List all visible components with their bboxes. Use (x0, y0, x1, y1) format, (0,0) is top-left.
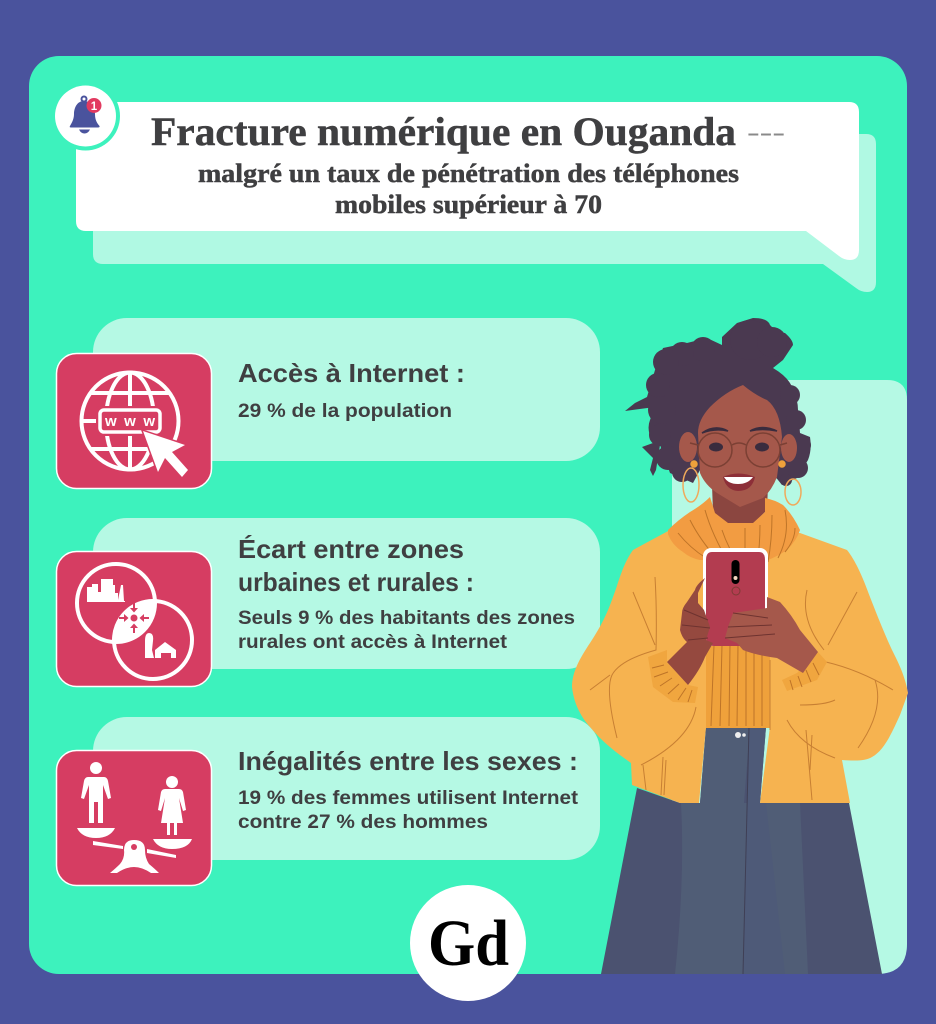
panel: gender inequality (56, 717, 600, 886)
card background (93, 318, 600, 461)
heading: Inégalités entre les sexes : (238, 746, 578, 776)
stand (110, 840, 159, 873)
body text line 2: contre 27 % des hommes (238, 811, 488, 833)
heading line 2: urbaines et rurales : (238, 567, 474, 597)
icon tile: globe www cursor: www (104, 413, 155, 430)
hands (667, 578, 818, 685)
turtleneck (668, 497, 800, 566)
card background (93, 717, 600, 860)
subtitle: malgré un taux de pénétration des téléphones (198, 159, 739, 188)
body text line 2: rurales ont accès à Internet (238, 631, 508, 653)
icon: notification bell: 1 (91, 101, 98, 113)
man (90, 762, 102, 774)
heading: Accès à Internet : (238, 358, 465, 388)
phone (703, 548, 768, 646)
sweater body (704, 630, 770, 728)
eyes (709, 442, 769, 452)
panel: urban rural gap (56, 518, 600, 686)
city silhouette (87, 579, 125, 602)
beam (93, 841, 176, 858)
smile (723, 474, 755, 491)
subtitle line 2: mobiles supérieur à 70 (335, 190, 602, 219)
icon tile: globe www cursor (56, 354, 212, 488)
illustration: woman holding phone (572, 318, 908, 974)
earrings (683, 461, 801, 505)
body text: 29 % de la population (238, 400, 452, 422)
panel: internet access (56, 318, 600, 488)
face (698, 385, 782, 507)
left plate (77, 828, 115, 838)
logo: Gd (410, 885, 526, 1001)
title: Fracture numérique en Ouganda (151, 109, 736, 154)
icon tile: overlapping circles (56, 552, 212, 686)
arrows converging (119, 603, 149, 633)
title speech bubble (76, 102, 876, 292)
right plate (153, 839, 192, 849)
barn and silo (145, 633, 176, 658)
cuffs (648, 650, 827, 703)
glasses (690, 433, 787, 467)
panel: light backdrop behind the woman (672, 380, 907, 974)
body text: Seuls 9 % des habitants des zones (238, 607, 575, 629)
body text: 19 % des femmes utilisent Internet (238, 787, 579, 809)
brows (702, 428, 777, 433)
icon: notification bell (51, 82, 120, 150)
card background (93, 518, 600, 669)
heading: Écart entre zones (238, 534, 464, 564)
logo: Gd: Gd (428, 907, 509, 980)
cardigan (572, 530, 908, 803)
hair (625, 318, 811, 486)
bubble white (76, 102, 859, 260)
woman (166, 776, 178, 788)
bubble shadow (93, 134, 876, 292)
skirt (601, 727, 882, 974)
title dashes: --- (747, 118, 785, 147)
icon tile: balance scale (56, 750, 212, 886)
ears (679, 432, 797, 462)
neck (712, 485, 768, 524)
